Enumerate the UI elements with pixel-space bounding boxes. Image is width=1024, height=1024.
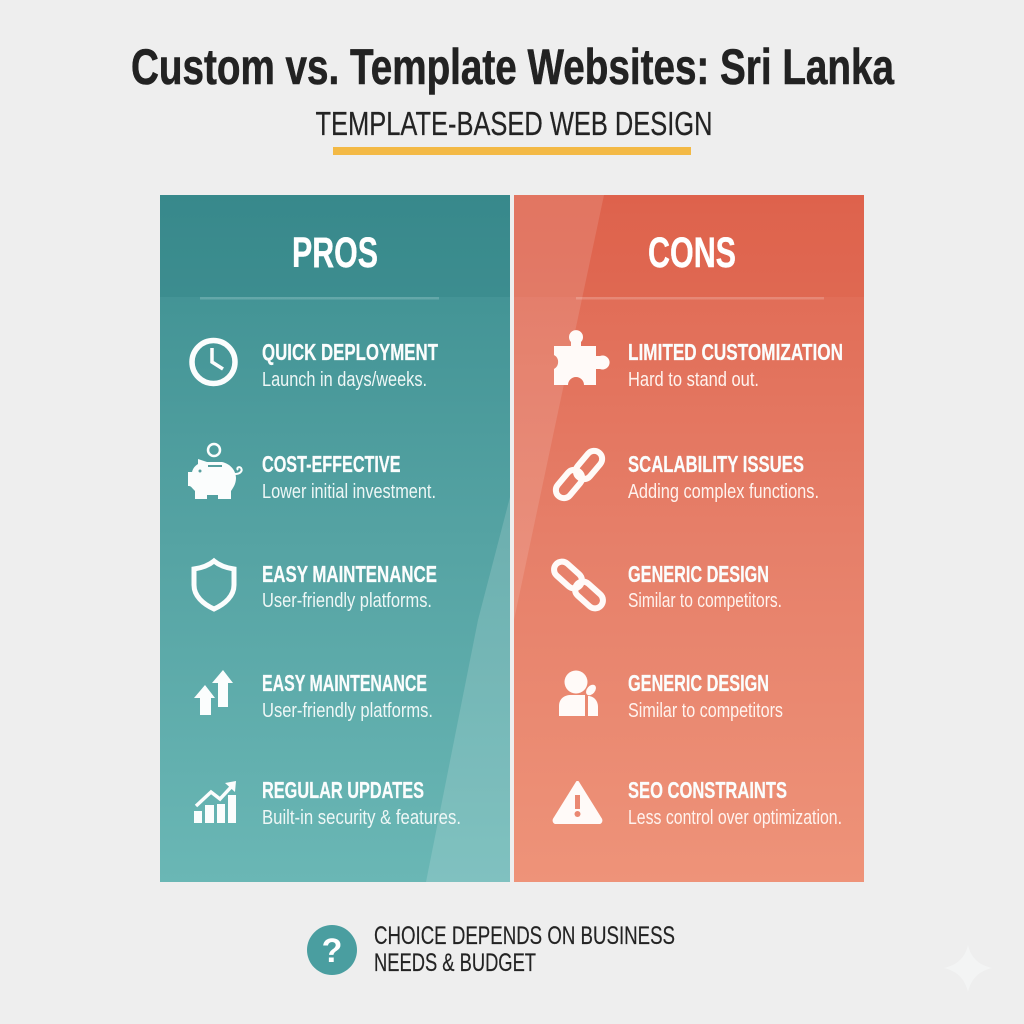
icon: puzzle piece (554, 330, 610, 385)
callout: conclusion: NEEDS & BUDGET (374, 949, 536, 977)
item: generic design second: GENERIC DESIGN (628, 670, 769, 696)
item: seo constraints: SEO CONSTRAINTS (628, 777, 787, 803)
item: easy maintenance second (194, 670, 433, 722)
item: easy maintenance (194, 561, 437, 612)
item: quick deployment: QUICK DEPLOYMENT (262, 339, 438, 365)
item: scalability issues (553, 448, 819, 503)
icon: chain link diagonal up (553, 448, 605, 501)
item: easy maintenance second: User-friendly platforms. (262, 700, 433, 722)
item: quick deployment: Launch in days/weeks. (262, 369, 427, 391)
icon: question mark (307, 925, 357, 975)
item: generic design: GENERIC DESIGN (628, 561, 769, 587)
icon: chain link diagonal down (551, 558, 606, 612)
icon: clock (192, 340, 235, 384)
callout: conclusion: CHOICE DEPENDS ON BUSINESS (374, 922, 675, 950)
item: regular updates: REGULAR UPDATES (262, 777, 424, 803)
heading: pros: PROS (292, 229, 378, 277)
icon: sparkle watermark (944, 945, 992, 992)
item: easy maintenance: User-friendly platforms. (262, 590, 432, 612)
item: scalability issues: SCALABILITY ISSUES (628, 451, 804, 477)
icon: question mark: ? (322, 932, 342, 970)
item: cost-effective (188, 444, 436, 503)
heading: cons: CONS (648, 229, 736, 277)
icon: up arrows (194, 670, 233, 715)
panel: pros (160, 195, 510, 882)
subtitle: TEMPLATE-BASED WEB DESIGN (316, 106, 712, 143)
icon: person (559, 670, 598, 716)
item: cost-effective: Lower initial investment. (262, 481, 436, 503)
item: easy maintenance: EASY MAINTENANCE (262, 561, 437, 587)
item: regular updates (194, 777, 461, 829)
item: cost-effective: COST-EFFECTIVE (262, 451, 400, 477)
item: limited customization: Hard to stand out. (628, 369, 759, 391)
callout: conclusion (307, 922, 675, 977)
item: quick deployment (192, 339, 438, 391)
icon: warning triangle (554, 782, 601, 823)
item: generic design: Similar to competitors. (628, 590, 782, 612)
item: easy maintenance second: EASY MAINTENANCE (262, 670, 427, 696)
panel: cons (514, 195, 864, 882)
item: regular updates: Built-in security & features. (262, 807, 461, 829)
subtitle underline (333, 147, 691, 155)
icon: shield (194, 561, 234, 609)
item: seo constraints (554, 777, 842, 829)
item: limited customization (554, 330, 843, 391)
item: generic design second (559, 670, 783, 722)
item: scalability issues: Adding complex functions. (628, 481, 819, 503)
item: limited customization: LIMITED CUSTOMIZATION (628, 339, 843, 365)
item: seo constraints: Less control over optimization. (628, 807, 842, 829)
icon: piggy bank (188, 444, 242, 499)
icon: growth chart (194, 781, 236, 823)
item: generic design second: Similar to competitors (628, 700, 783, 722)
item: generic design (551, 558, 782, 612)
